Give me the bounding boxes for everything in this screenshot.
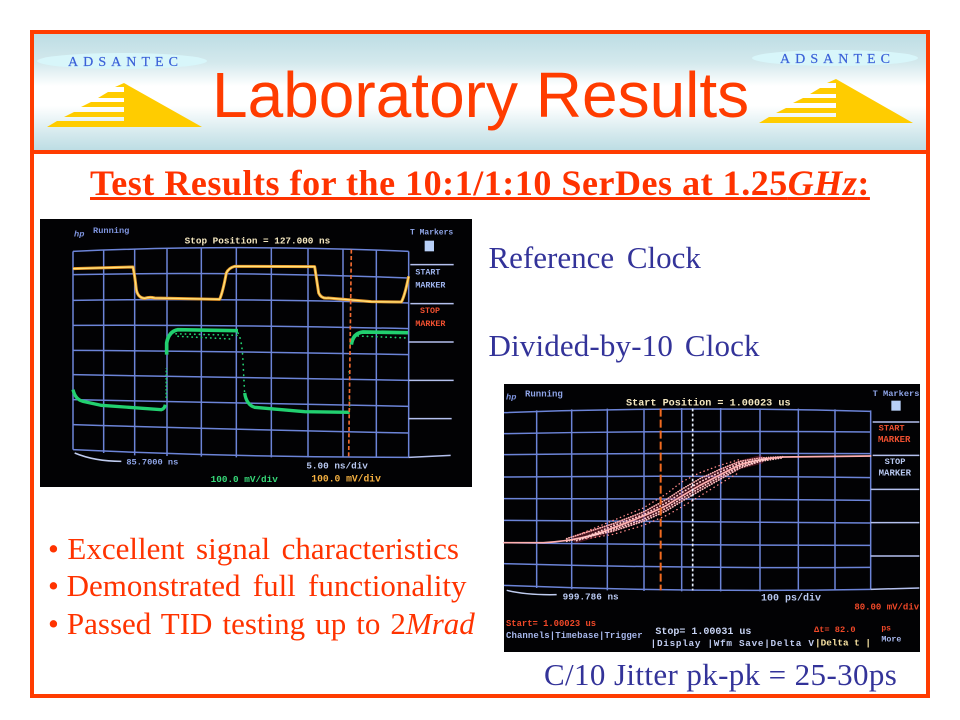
screen labels: |Delta t | — [815, 637, 871, 648]
screen labels: Running — [93, 226, 129, 236]
screen labels: START — [415, 268, 440, 278]
screen labels: T Markers — [873, 389, 919, 399]
screen labels: MARKER — [415, 319, 445, 329]
icon: left ADSANTEC logo: ADSANTEC — [68, 55, 178, 70]
screen labels: 80.00 mV/div — [854, 602, 920, 612]
title: Laboratory Results — [212, 59, 749, 131]
screen labels: Start Position = 1.00023 us — [626, 397, 791, 409]
screen labels — [506, 389, 920, 649]
stop marker line — [349, 250, 351, 457]
subtitle: Test Results for the 10:1/1:10 SerDes at 1.25GHz: — [90, 163, 870, 203]
screen labels: Channels|Timebase|Trigger — [506, 631, 643, 641]
screen labels: START — [879, 424, 905, 434]
jitter eye scatter — [504, 456, 871, 543]
yellow clock trace — [73, 266, 409, 302]
green divided clock trace — [73, 330, 408, 412]
screen labels: hp — [506, 392, 516, 402]
screen labels: 999.786 ns — [563, 591, 619, 602]
icon: right ADSANTEC logo: ADSANTEC — [780, 52, 890, 67]
icon: right ADSANTEC logo — [752, 50, 918, 123]
oscilloscope chart: clock waveforms — [40, 219, 472, 487]
grid — [73, 247, 454, 461]
screen labels: Stop= 1.00031 us — [655, 627, 751, 638]
screen labels: 100.0 mV/div — [211, 474, 278, 485]
screen labels: 85.7000 ns — [126, 458, 178, 468]
screen labels: 100.0 mV/div — [311, 473, 381, 484]
screen labels — [74, 226, 453, 485]
text: bullet list — [48, 530, 475, 640]
text: jitter caption: C/10 Jitter pk-pk = 25-30ps — [544, 657, 897, 692]
screen labels: Stop Position = 127.000 ns — [185, 236, 331, 247]
screen labels: MARKER — [415, 280, 445, 290]
panel: header band with gradient — [34, 34, 926, 150]
screen labels: Start= 1.00023 us — [506, 619, 596, 629]
text: divided clock label: Divided-by-10 Clock — [488, 328, 760, 363]
icon: left ADSANTEC logo — [37, 53, 207, 127]
text: reference clock label: Reference Clock — [488, 240, 701, 275]
screen labels: ps — [881, 625, 891, 634]
screen labels: hp — [74, 229, 84, 239]
header divider — [30, 150, 930, 154]
screen labels: STOP — [885, 457, 905, 467]
screen labels: |Display |Wfm Save|Delta V — [651, 638, 814, 649]
text: bullet list: • Demonstrated full functionality — [48, 568, 466, 603]
screen labels: STOP — [420, 306, 440, 316]
screen labels: 5.00 ns/div — [306, 461, 368, 472]
screen labels: Running — [525, 390, 563, 400]
screen labels: 100 ps/div — [761, 593, 821, 605]
screen labels: T Markers — [410, 229, 453, 238]
markers — [658, 409, 664, 590]
screen labels: MARKER — [878, 435, 911, 445]
text: bullet list: • Passed TID testing up to 2Mrad — [48, 606, 475, 640]
text: bullet list: • Excellent signal characteristics — [48, 530, 459, 566]
screen labels: MARKER — [879, 468, 912, 478]
screen labels: Δt= 82.0 — [814, 625, 856, 635]
screen labels: More — [881, 634, 901, 644]
grid — [504, 408, 919, 595]
oscilloscope chart: jitter — [503, 384, 920, 652]
